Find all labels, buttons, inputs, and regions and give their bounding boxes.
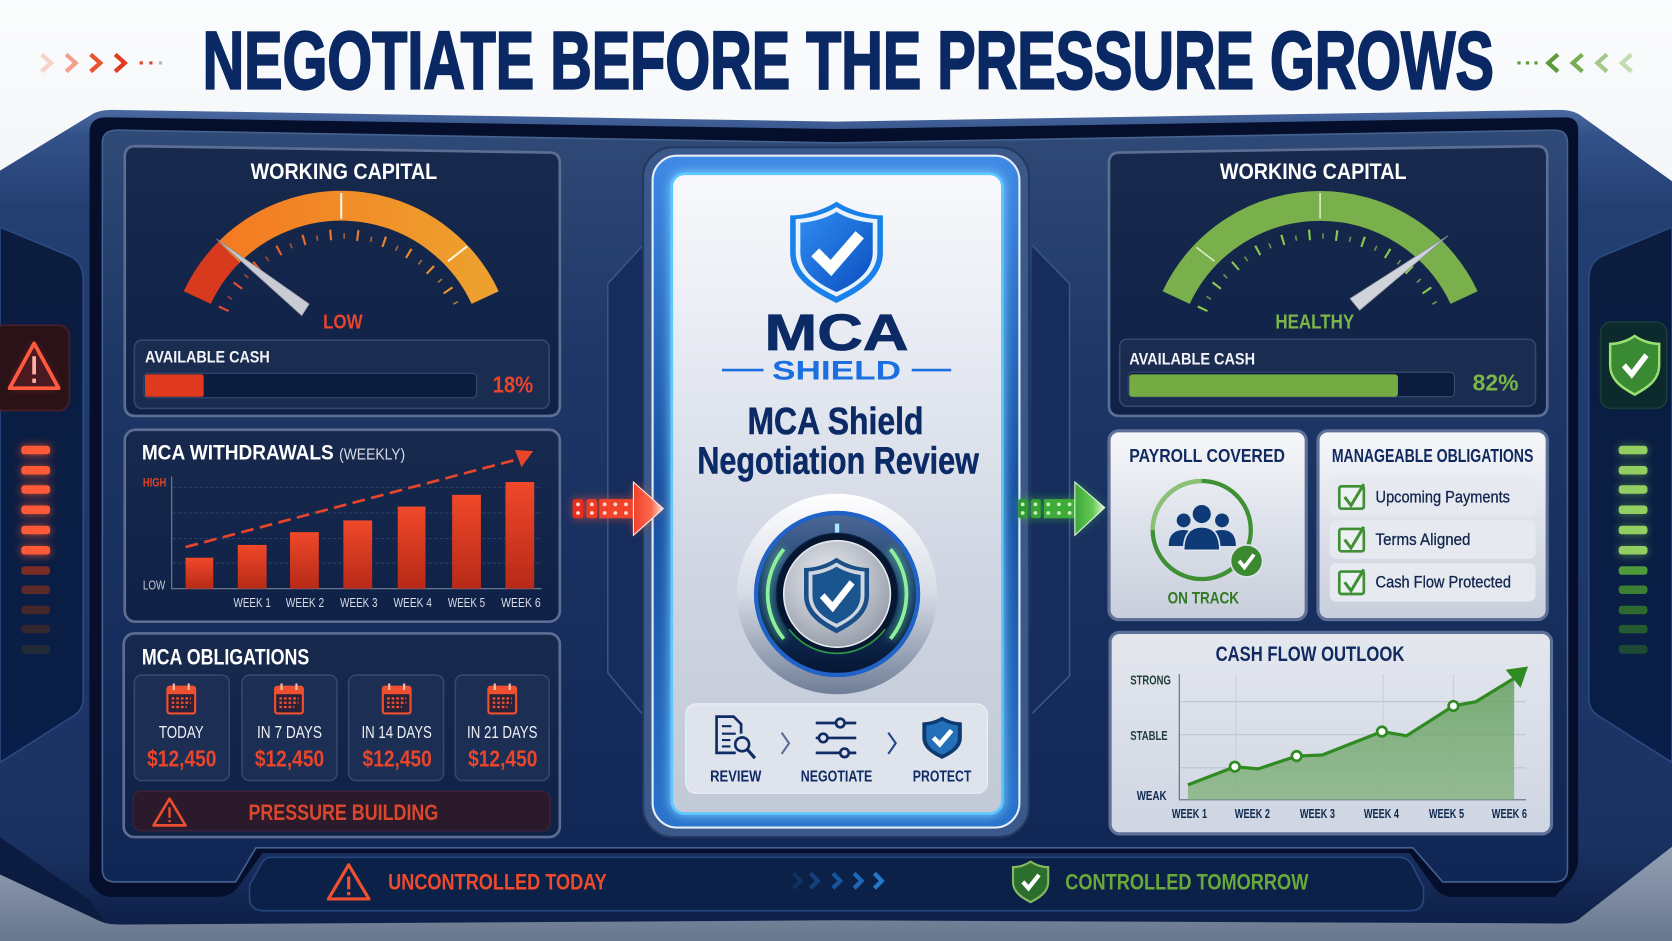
- gauge: low: [197, 193, 485, 316]
- label: uncontrolled today: UNCONTROLLED TODAY: [388, 869, 607, 894]
- card: in 21 days: [455, 675, 549, 781]
- line chart: [1130, 666, 1528, 821]
- line chart: STABLE: [1130, 728, 1168, 743]
- logo wordmark: MCA: MCA: [765, 304, 909, 361]
- checklist item: upcoming payments: [1330, 478, 1536, 516]
- line chart: WEEK 3: [1300, 806, 1335, 821]
- icon: MCA Shield logo shield: [790, 202, 883, 303]
- bar chart: WEEK 4: [393, 595, 432, 610]
- bar chart: HIGH: [143, 475, 166, 489]
- panel: green shield indicator: [1601, 322, 1667, 408]
- available cash meter: 82%: [1473, 369, 1519, 395]
- icon: negotiate sliders: [816, 719, 856, 757]
- heading: MANAGEABLE OBLIGATIONS: [1332, 445, 1533, 466]
- card: today: TODAY: [159, 722, 204, 742]
- card: today: $12,450: [147, 746, 216, 772]
- card: in 7 days: $12,450: [255, 746, 324, 772]
- panel: MCA Shield negotiation review: [643, 147, 1029, 837]
- card: in 21 days: $12,450: [468, 746, 537, 772]
- icon: warning triangle: [154, 799, 186, 825]
- panel: cash flow outlook: [1110, 632, 1552, 834]
- card: in 14 days: [349, 675, 444, 781]
- heading: MCA Shield: MCA Shield: [747, 400, 923, 443]
- heading: MCA WITHDRAWALS: [142, 442, 334, 465]
- panel: MCA obligations: [124, 633, 560, 837]
- status label: HEALTHY: [1275, 311, 1355, 333]
- icon: chevron: [782, 733, 789, 754]
- bar chart: WEEK 3: [340, 595, 377, 610]
- process steps strip: [686, 704, 987, 793]
- line chart: WEEK 4: [1364, 806, 1400, 821]
- available cash meter: 18%: [493, 371, 533, 397]
- checklist item: upcoming payments: Upcoming Payments: [1376, 487, 1510, 506]
- meter: red LED column: [21, 446, 50, 654]
- panel: payroll covered: [1109, 431, 1306, 620]
- icon: calendar: [167, 684, 195, 713]
- gauge needle: [1350, 236, 1448, 310]
- card: in 14 days: IN 14 DAYS: [361, 722, 432, 742]
- icon: warning triangle, red: [10, 343, 59, 388]
- card: in 14 days: $12,450: [363, 746, 432, 772]
- panel: red alert indicator: [0, 325, 69, 411]
- gauge: healthy: [1176, 193, 1464, 310]
- bottom status bar: [250, 857, 1424, 911]
- checklist item: terms aligned: Terms Aligned: [1376, 530, 1470, 549]
- icon: team ring: [1153, 481, 1263, 579]
- panel: MCA withdrawals chart: [125, 430, 560, 622]
- icon: control knob: [737, 494, 937, 694]
- card: in 7 days: [242, 675, 337, 781]
- gauge needle: [216, 239, 309, 316]
- bar chart: WEEK 1: [234, 595, 271, 610]
- trend arrow: [186, 450, 533, 547]
- line chart: WEEK 1: [1172, 806, 1207, 821]
- heading: WORKING CAPITAL: [251, 159, 437, 184]
- heading: PAYROLL COVERED: [1129, 445, 1285, 466]
- available cash meter: AVAILABLE CASH: [1129, 350, 1255, 369]
- heading: MCA OBLIGATIONS: [142, 644, 309, 669]
- checklist item: terms aligned: [1330, 520, 1536, 559]
- icon: progress chevrons: [793, 873, 882, 888]
- line chart: WEAK: [1137, 788, 1167, 803]
- bar chart: WEEK 5: [448, 595, 485, 610]
- available cash meter: AVAILABLE CASH: [145, 348, 270, 367]
- callout: pressure building: [133, 791, 550, 831]
- heading qualifier: (WEEKLY): [339, 447, 405, 464]
- panel: working capital, healthy: [1109, 146, 1547, 416]
- bar chart: WEEK 6: [501, 595, 541, 610]
- line chart: STRONG: [1130, 673, 1171, 688]
- bar chart: WEEK 2: [286, 595, 324, 610]
- panel: manageable obligations: [1318, 431, 1547, 620]
- checklist item: cash flow protected: [1330, 563, 1536, 601]
- available cash meter: [1120, 339, 1536, 406]
- logo wordmark: SHIELD: SHIELD: [772, 356, 901, 386]
- card: today: [134, 675, 229, 781]
- meter: green LED column: [1619, 446, 1647, 654]
- panel: working capital, low: [125, 146, 560, 416]
- heading: Negotiation Review: Negotiation Review: [697, 439, 979, 482]
- heading: WORKING CAPITAL: [1220, 159, 1406, 184]
- icon: chevron: [888, 733, 896, 754]
- icon: review document: [717, 717, 755, 758]
- heading: CASH FLOW OUTLOOK: [1216, 643, 1404, 666]
- icon: green chevrons pointing left: [1517, 54, 1631, 71]
- arrow: green out of review: [1018, 482, 1105, 535]
- callout: pressure building: PRESSURE BUILDING: [248, 800, 438, 825]
- status label: ON TRACK: [1168, 589, 1240, 608]
- available cash meter: [134, 340, 549, 408]
- line chart: WEEK 6: [1492, 806, 1527, 821]
- arrow: red into review: [573, 482, 663, 535]
- icon: red chevrons pointing right: [42, 54, 162, 71]
- card: in 7 days: IN 7 DAYS: [257, 722, 322, 742]
- line chart: WEEK 5: [1429, 806, 1464, 821]
- icon: protect shield: [922, 717, 962, 759]
- label: protect: PROTECT: [913, 769, 972, 786]
- bar chart: [143, 450, 542, 610]
- icon: calendar: [275, 684, 303, 713]
- icon: calendar: [383, 684, 411, 713]
- card: in 21 days: IN 21 DAYS: [467, 722, 537, 742]
- label: negotiate: NEGOTIATE: [801, 769, 873, 786]
- icon: warning triangle: [328, 865, 369, 899]
- bar chart: LOW: [143, 578, 166, 593]
- status label: LOW: [323, 311, 363, 333]
- label: controlled tomorrow: CONTROLLED TOMORROW: [1065, 869, 1309, 894]
- line chart: WEEK 2: [1235, 806, 1270, 821]
- label: review: REVIEW: [710, 769, 762, 786]
- checklist item: cash flow protected: Cash Flow Protected: [1376, 573, 1511, 592]
- icon: calendar: [488, 684, 516, 713]
- icon: green shield: [1610, 336, 1659, 395]
- icon: green shield: [1013, 862, 1048, 902]
